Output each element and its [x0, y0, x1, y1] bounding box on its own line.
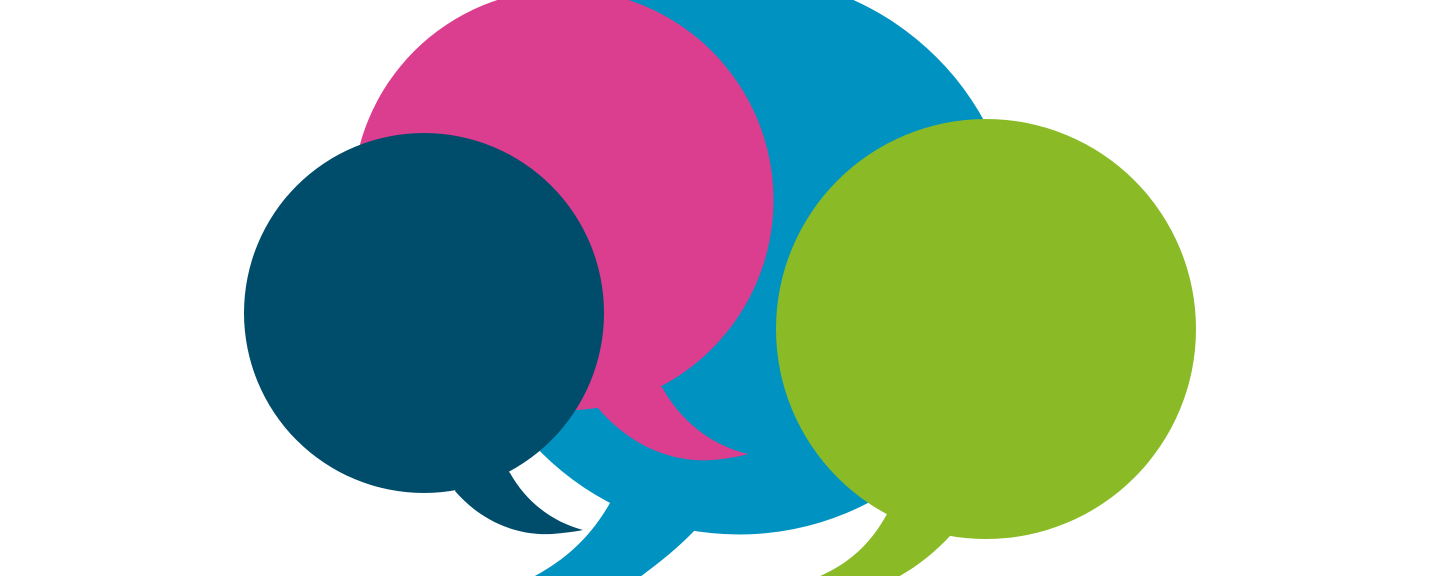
icon: green speech bubble: [776, 119, 1196, 576]
icon: dark navy speech bubble: [244, 133, 604, 534]
icon: blue speech bubble: [460, 0, 1018, 576]
icon: pink speech bubble: [352, 0, 774, 460]
